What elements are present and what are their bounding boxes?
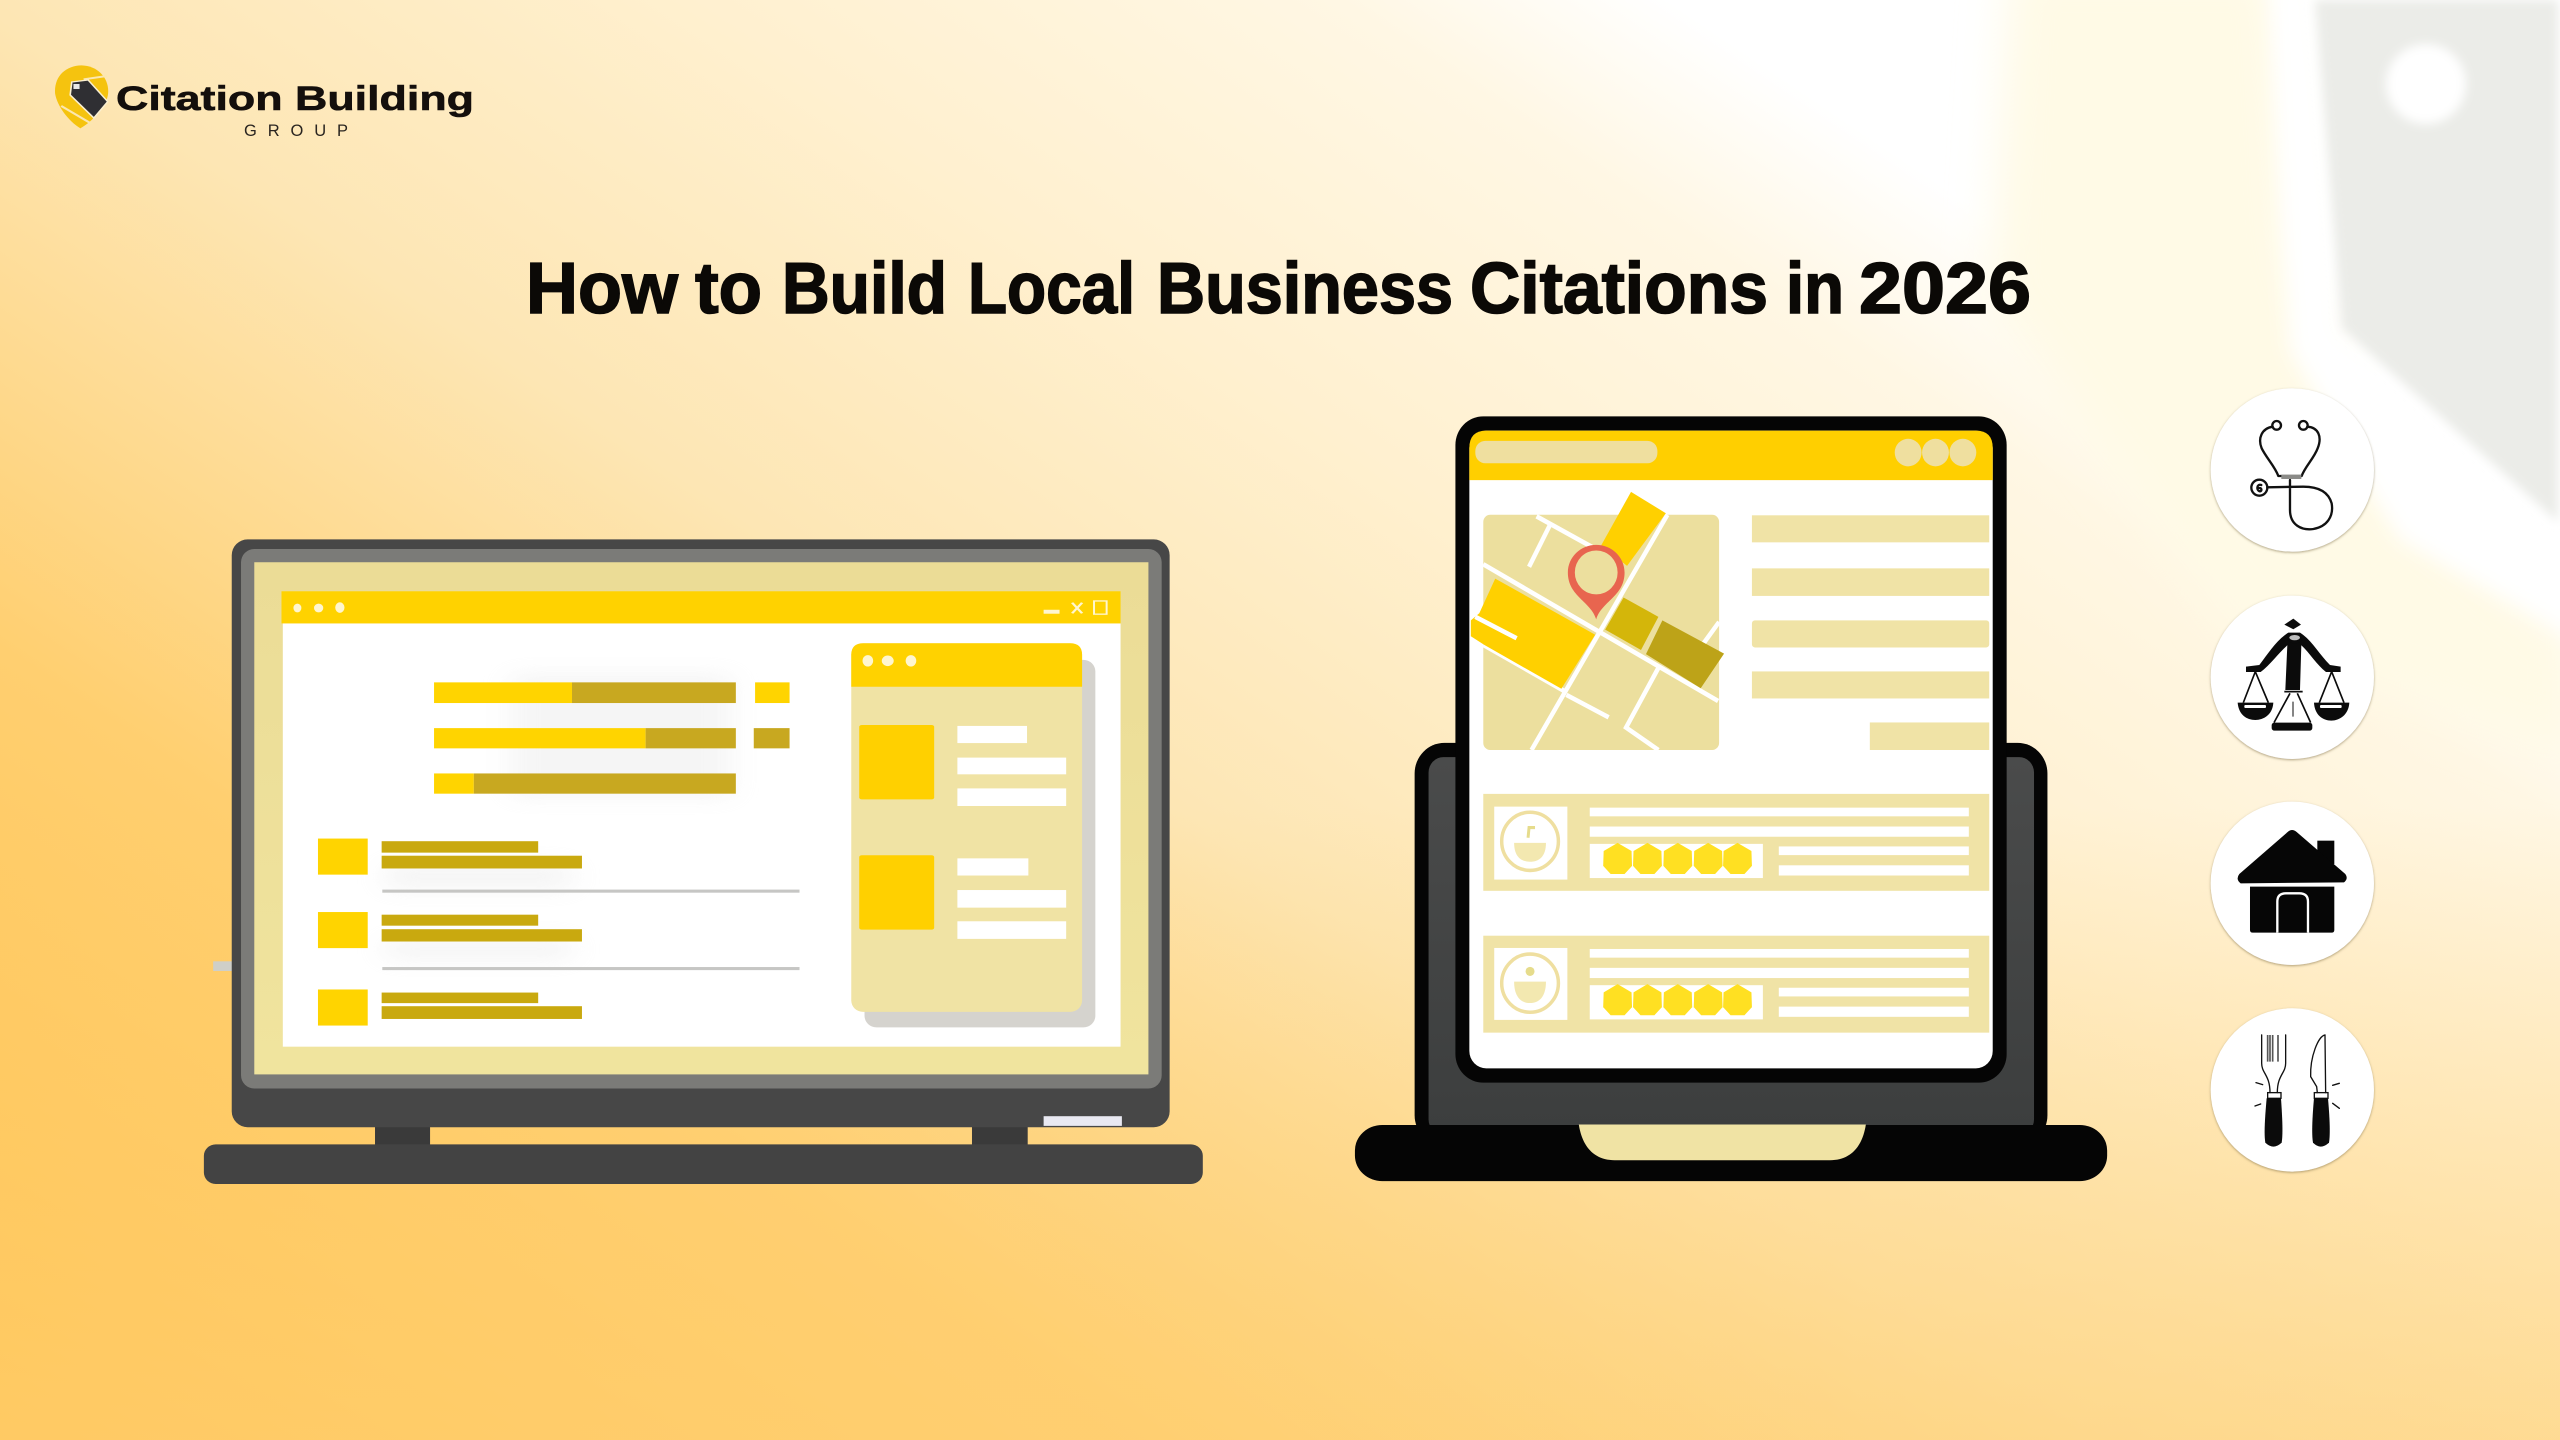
laptop side notch bbox=[213, 961, 233, 971]
icon: house in circle bbox=[2211, 802, 2374, 965]
side panel bbox=[851, 643, 1095, 1027]
laptop status tag bbox=[1044, 1116, 1122, 1126]
laptop bezel bbox=[241, 549, 1162, 1088]
logo wordmark: Citation Building bbox=[116, 80, 474, 118]
tablet header bar bbox=[1469, 431, 1993, 480]
map bbox=[1471, 492, 1724, 750]
tablet frame bbox=[1455, 416, 2007, 1083]
logo subline: GROUP bbox=[244, 122, 348, 140]
stand base bbox=[1355, 1124, 2107, 1181]
logo icon: map pin with tag bbox=[55, 65, 108, 128]
icon: fork and knife in circle bbox=[2211, 1008, 2374, 1172]
browser window bbox=[281, 591, 1121, 1047]
title: to bbox=[695, 249, 762, 329]
title: Local bbox=[968, 249, 1135, 329]
tablet stand bbox=[1415, 743, 2047, 1146]
icon: scales of justice in circle bbox=[2211, 596, 2374, 759]
title: Business bbox=[1157, 249, 1453, 329]
title: 2026 bbox=[1859, 249, 2031, 329]
list rows bbox=[318, 839, 800, 1026]
review card 1 bbox=[1483, 794, 1989, 891]
info lines bbox=[1752, 515, 1989, 750]
tablet screen bbox=[1469, 431, 1993, 1068]
progress bars bbox=[434, 682, 790, 794]
laptop body bbox=[232, 539, 1170, 1127]
laptop illustration bbox=[204, 539, 1203, 1184]
title: Citations bbox=[1470, 249, 1768, 329]
laptop base bar bbox=[204, 1144, 1203, 1184]
tablet illustration bbox=[1355, 416, 2107, 1181]
background decoration: pale band and grey shape bbox=[1990, 0, 2560, 760]
title: Build bbox=[782, 249, 947, 329]
soft bar shadows bbox=[386, 674, 731, 960]
laptop screen backdrop bbox=[254, 562, 1148, 1074]
title: How bbox=[526, 249, 679, 329]
icon: stethoscope in circle bbox=[2211, 388, 2374, 552]
logo: Citation Building Group bbox=[55, 65, 474, 140]
laptop feet bbox=[375, 1125, 1028, 1147]
title: in bbox=[1786, 249, 1844, 329]
map pin bbox=[1568, 545, 1625, 619]
review card 2 bbox=[1483, 936, 1989, 1033]
